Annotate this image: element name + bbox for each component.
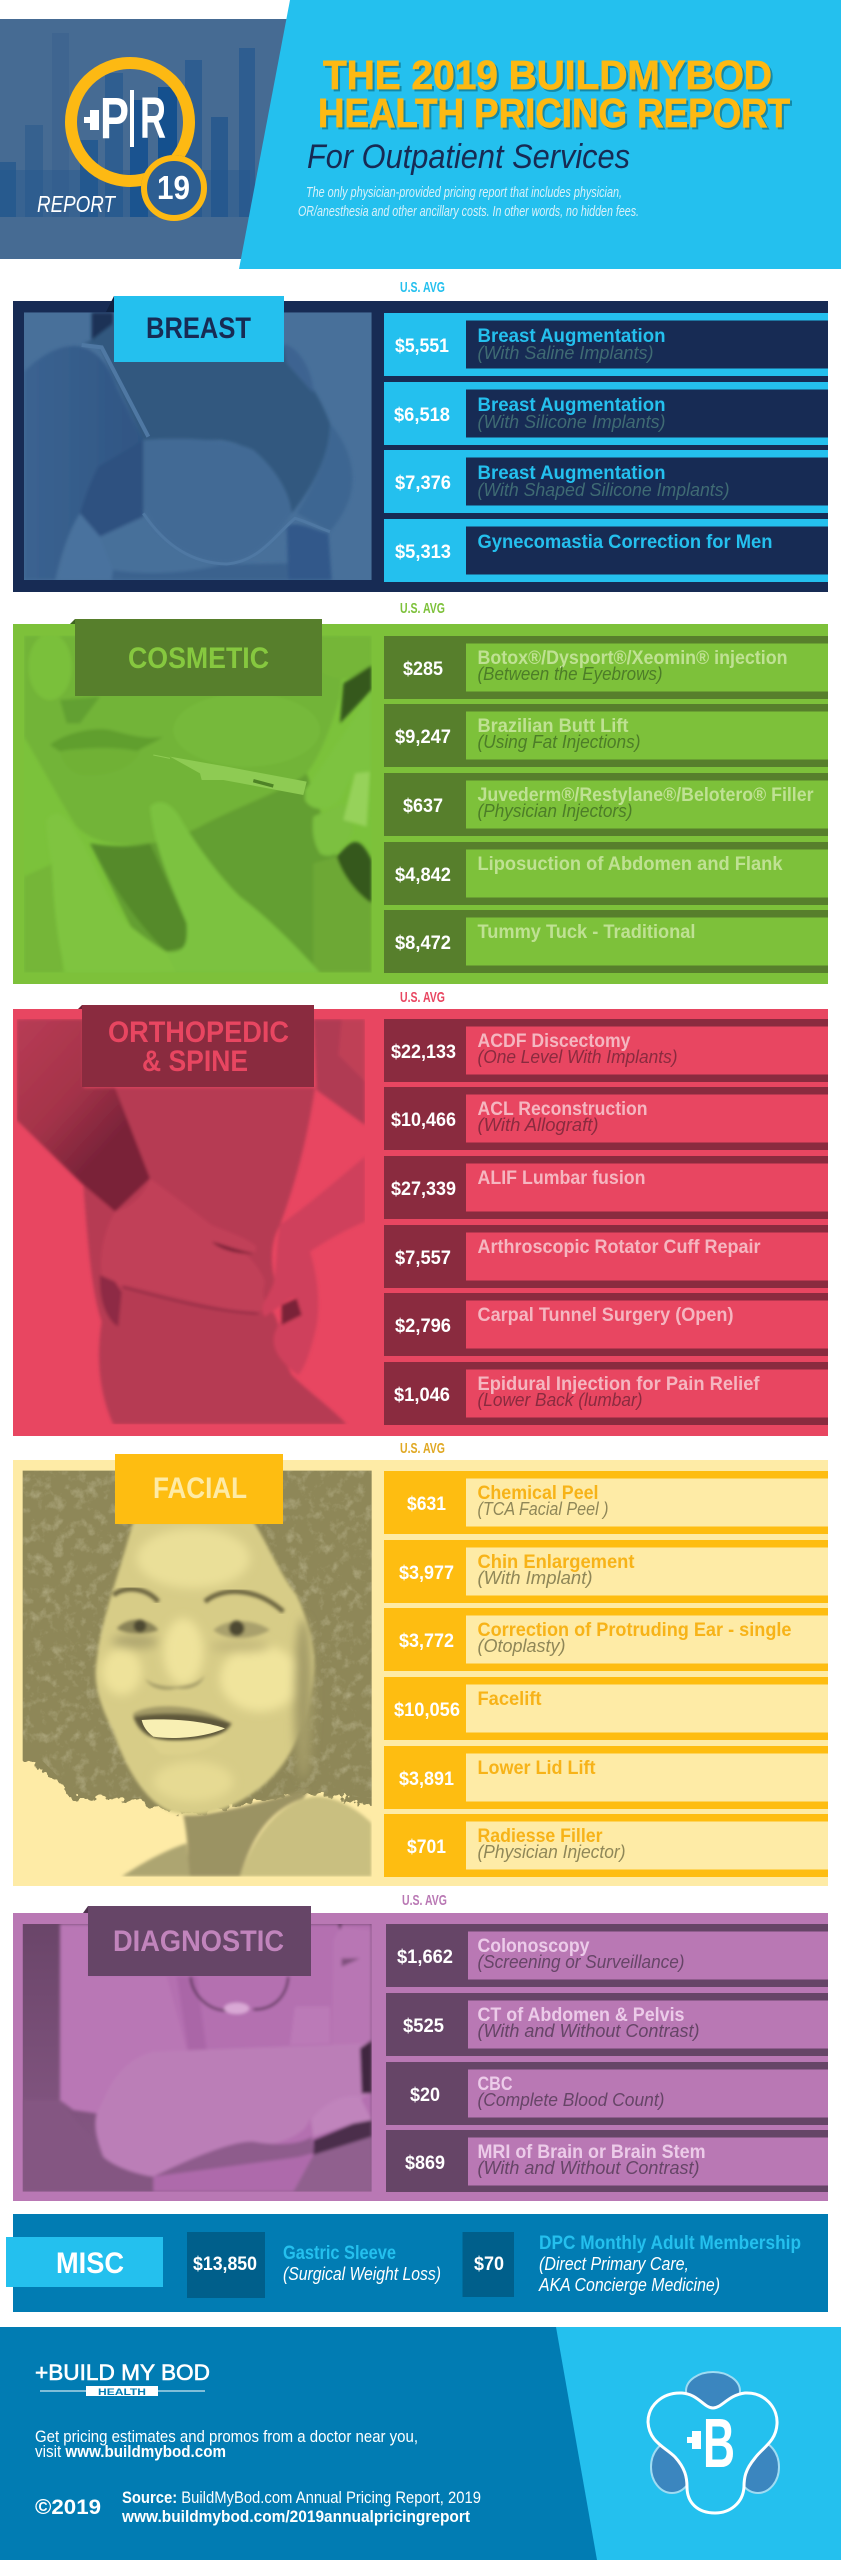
row: ACL: ACL Reconstruction bbox=[478, 1099, 648, 1120]
tab: diagnostic bbox=[83, 1906, 311, 1976]
row: Breast Augmentation shaped: Breast Augmentation bbox=[478, 463, 666, 484]
panel: orthopedic and spine bbox=[13, 1005, 828, 1436]
footer bbox=[0, 2327, 841, 2560]
row: Botox: (Between the Eyebrows) bbox=[478, 664, 662, 684]
row: CT: (With and Without Contrast) bbox=[478, 2021, 700, 2041]
row: Gynecomastia: $5,313 bbox=[395, 542, 451, 563]
row: Protruding Ear: $3,772 bbox=[399, 1631, 454, 1652]
text: call to action bbox=[35, 2427, 418, 2461]
icon: BuildMyBod clover: B bbox=[703, 2404, 735, 2482]
title: THE 2019 BUILDMYBOD bbox=[325, 54, 774, 100]
subtitle: For Outpatient Services bbox=[307, 138, 630, 176]
tab: breast bbox=[106, 296, 284, 362]
title bbox=[318, 52, 792, 138]
tab: orthopedic: ORTHOPEDIC bbox=[108, 1016, 289, 1049]
title: HEALTH PRICING REPORT bbox=[318, 90, 790, 136]
row: Juvederm: (Physician Injectors) bbox=[478, 801, 632, 821]
row: Chin Enlargement bbox=[384, 1540, 828, 1603]
row: Breast Augmentation saline: (With Saline Implants) bbox=[478, 343, 654, 363]
header: logo panel bbox=[0, 19, 300, 259]
row: Breast Augmentation saline: $5,551 bbox=[395, 336, 449, 357]
price: gastric sleeve bbox=[187, 2232, 265, 2298]
photo: breast bbox=[24, 312, 372, 580]
row: Facelift: $10,056 bbox=[394, 1700, 460, 1721]
photo: diagnostic bbox=[23, 1924, 372, 2192]
title: THE 2019 BUILDMYBOD bbox=[323, 52, 772, 98]
row: Juvederm: Juvederm®/Restylane®/Belotero® Filler bbox=[478, 785, 814, 806]
row: Brazilian Butt Lift: Brazilian Butt Lift bbox=[478, 716, 629, 737]
photo: cosmetic bbox=[24, 633, 372, 973]
row: Protruding Ear: Correction of Protruding Ear - single bbox=[478, 1620, 792, 1641]
row: MRI: $869 bbox=[405, 2153, 445, 2174]
description: The only physician-provided pricing report that includes physician, bbox=[306, 184, 622, 201]
column heading: U.S. AVG facial: U.S. AVG bbox=[400, 1440, 445, 1457]
panel: facial bbox=[10, 1454, 828, 1886]
row: Botox bbox=[384, 636, 828, 699]
row: Chemical Peel bbox=[384, 1471, 828, 1534]
decorative chart bars bbox=[0, 33, 255, 217]
logo: BuildMyBod Health bbox=[35, 2360, 210, 2397]
row: Chemical Peel: Chemical Peel bbox=[478, 1483, 598, 1504]
tab: cosmetic bbox=[70, 619, 322, 696]
row: ACL: $10,466 bbox=[391, 1110, 456, 1131]
description bbox=[298, 184, 639, 220]
row: Breast Augmentation saline bbox=[384, 313, 828, 376]
panel: breast bbox=[13, 296, 828, 592]
logo: PR report ring: P bbox=[100, 86, 129, 151]
tab: diagnostic: DIAGNOSTIC bbox=[113, 1925, 284, 1958]
text: copyright: ©2019 bbox=[35, 2496, 101, 2519]
row: Botox: Botox®/Dysport®/Xeomin® injection bbox=[478, 648, 788, 669]
row: Breast Augmentation shaped: (With Shaped Silicone Implants) bbox=[478, 480, 730, 500]
row: Epidural: $1,046 bbox=[394, 1385, 450, 1406]
row: CT: $525 bbox=[403, 2016, 444, 2037]
row: Juvederm bbox=[384, 773, 828, 836]
description: OR/anesthesia and other ancillary costs. In other words, no hidden fees. bbox=[298, 203, 639, 220]
row: ACDF: (One Level With Implants) bbox=[478, 1047, 678, 1067]
label: DPC membership bbox=[538, 2233, 801, 2295]
logo: PR report ring: 19 bbox=[157, 169, 190, 206]
text: call to action: Get pricing estimates and promos from a doctor near you, bbox=[35, 2427, 418, 2446]
row: CBC: (Complete Blood Count) bbox=[478, 2090, 664, 2110]
row: Epidural bbox=[384, 1362, 828, 1425]
row: Chemical Peel: (TCA Facial Peel ) bbox=[478, 1499, 608, 1519]
row: CT bbox=[386, 1993, 828, 2056]
tab: cosmetic: COSMETIC bbox=[128, 642, 269, 675]
row: CBC: $20 bbox=[410, 2085, 440, 2106]
row: Breast Augmentation silicone: Breast Augmentation bbox=[478, 395, 666, 416]
row: Rotator Cuff: $7,557 bbox=[395, 1248, 451, 1269]
label: DPC membership: DPC Monthly Adult Membership bbox=[539, 2233, 801, 2254]
row: Protruding Ear: (Otoplasty) bbox=[478, 1636, 566, 1656]
tab: facial: FACIAL bbox=[153, 1472, 247, 1505]
tab: misc bbox=[6, 2237, 163, 2287]
row: Colonoscopy bbox=[386, 1924, 828, 1987]
photo: orthopedic bbox=[17, 1019, 365, 1424]
text: call to action: visit www.buildmybod.com bbox=[35, 2442, 226, 2461]
logo: PR report ring: REPORT bbox=[37, 191, 117, 217]
label: gastric sleeve: Gastric Sleeve bbox=[283, 2243, 396, 2264]
row: Breast Augmentation silicone: $6,518 bbox=[394, 405, 450, 426]
row: Epidural: (Lower Back (lumbar) bbox=[478, 1390, 642, 1410]
label: gastric sleeve bbox=[283, 2243, 441, 2284]
row: Carpal Tunnel: Carpal Tunnel Surgery (Open) bbox=[478, 1305, 734, 1326]
row: CT: CT of Abdomen & Pelvis bbox=[478, 2005, 684, 2026]
panel: diagnostic bbox=[13, 1906, 828, 2201]
row: Lower Lid Lift: Lower Lid Lift bbox=[478, 1758, 596, 1779]
header: title panel bbox=[239, 0, 841, 269]
photo: facial bbox=[10, 1458, 387, 1877]
icon: BuildMyBod clover bbox=[648, 2372, 779, 2513]
row: Radiesse Filler: (Physician Injector) bbox=[478, 1842, 626, 1862]
row: Lower Lid Lift bbox=[384, 1746, 828, 1809]
price: DPC membership: $70 bbox=[474, 2254, 504, 2275]
row: Botox: $285 bbox=[403, 659, 443, 680]
row: Facelift bbox=[384, 1677, 828, 1740]
row: Carpal Tunnel: $2,796 bbox=[395, 1316, 451, 1337]
label: gastric sleeve: (Surgical Weight Loss) bbox=[283, 2264, 441, 2284]
text: source bbox=[121, 2488, 481, 2526]
row: ACDF bbox=[384, 1019, 828, 1082]
row: Radiesse Filler: Radiesse Filler bbox=[478, 1826, 603, 1847]
panel: misc bbox=[6, 2214, 828, 2312]
row: Liposuction: $4,842 bbox=[395, 865, 451, 886]
tab: orthopedic: & SPINE bbox=[142, 1045, 248, 1078]
row: ALIF: $27,339 bbox=[391, 1179, 456, 1200]
row: Breast Augmentation silicone: (With Silicone Implants) bbox=[478, 412, 666, 432]
label: DPC membership: AKA Concierge Medicine) bbox=[538, 2275, 720, 2295]
row: ACDF: $22,133 bbox=[391, 1042, 456, 1063]
row: Radiesse Filler bbox=[384, 1814, 828, 1877]
row: Facelift: Facelift bbox=[478, 1689, 542, 1710]
row: Lower Lid Lift: $3,891 bbox=[399, 1769, 454, 1790]
row: Gynecomastia bbox=[384, 519, 828, 582]
row: Liposuction bbox=[384, 842, 828, 905]
row: Colonoscopy: Colonoscopy bbox=[478, 1936, 590, 1957]
logo: BuildMyBod Health: HEALTH bbox=[98, 2387, 146, 2397]
row: Rotator Cuff bbox=[384, 1225, 828, 1288]
text: source: Source: BuildMyBod.com Annual Pricing Report, 2019 bbox=[122, 2488, 481, 2507]
row: ACL: (With Allograft) bbox=[478, 1115, 598, 1135]
row: Epidural: Epidural Injection for Pain Relief bbox=[478, 1374, 760, 1395]
tab: misc: MISC bbox=[56, 2247, 124, 2280]
label: DPC membership: (Direct Primary Care, bbox=[539, 2254, 689, 2274]
column heading: U.S. AVG cosmetic: U.S. AVG bbox=[400, 600, 445, 617]
row: Liposuction: Liposuction of Abdomen and Flank bbox=[478, 854, 783, 875]
row: Breast Augmentation shaped bbox=[384, 450, 828, 513]
price: DPC membership bbox=[462, 2232, 514, 2297]
row: Gynecomastia: Gynecomastia Correction for Men bbox=[478, 532, 772, 553]
column heading: U.S. AVG breast: U.S. AVG bbox=[400, 279, 445, 296]
row: Rotator Cuff: Arthroscopic Rotator Cuff Repair bbox=[478, 1237, 761, 1258]
row: Brazilian Butt Lift bbox=[384, 704, 828, 767]
panel: cosmetic bbox=[13, 619, 828, 984]
row: Tummy Tuck bbox=[384, 910, 828, 973]
row: Breast Augmentation shaped: $7,376 bbox=[395, 473, 451, 494]
row: MRI: MRI of Brain or Brain Stem bbox=[478, 2142, 706, 2163]
column heading: U.S. AVG diagnostic: U.S. AVG bbox=[402, 1892, 447, 1909]
row: Tummy Tuck: Tummy Tuck - Traditional bbox=[478, 922, 696, 943]
tab: facial bbox=[115, 1454, 283, 1524]
row: Chin Enlargement: Chin Enlargement bbox=[478, 1552, 635, 1573]
tab: orthopedic bbox=[78, 1005, 314, 1087]
row: ACL bbox=[384, 1087, 828, 1150]
row: Chemical Peel: $631 bbox=[407, 1494, 446, 1515]
row: Brazilian Butt Lift: (Using Fat Injections) bbox=[478, 732, 640, 752]
logo: BuildMyBod Health: +BUILD MY BOD bbox=[35, 2360, 210, 2385]
logo: PR report ring: R bbox=[140, 86, 166, 151]
logo: PR report ring bbox=[37, 63, 207, 221]
tab: breast: BREAST bbox=[146, 312, 251, 345]
text: source: www.buildmybod.com/2019annualpricingreport bbox=[121, 2507, 470, 2526]
row: Colonoscopy: $1,662 bbox=[397, 1947, 453, 1968]
title: HEALTH PRICING REPORT bbox=[320, 92, 792, 138]
row: Colonoscopy: (Screening or Surveillance) bbox=[478, 1952, 684, 1972]
row: ACDF: ACDF Discectomy bbox=[478, 1031, 631, 1052]
price: gastric sleeve: $13,850 bbox=[193, 2254, 257, 2275]
row: Breast Augmentation saline: Breast Augmentation bbox=[478, 326, 666, 347]
row: MRI bbox=[386, 2130, 828, 2192]
row: ALIF: ALIF Lumbar fusion bbox=[478, 1168, 646, 1189]
row: CBC: CBC bbox=[478, 2074, 513, 2095]
row: ALIF bbox=[384, 1156, 828, 1219]
row: Chin Enlargement: $3,977 bbox=[399, 1563, 454, 1584]
row: Tummy Tuck: $8,472 bbox=[395, 933, 451, 954]
row: Carpal Tunnel bbox=[384, 1293, 828, 1356]
row: CBC bbox=[386, 2062, 828, 2125]
row: Juvederm: $637 bbox=[403, 796, 443, 817]
column heading: U.S. AVG orthopedic: U.S. AVG bbox=[400, 989, 445, 1006]
row: MRI: (With and Without Contrast) bbox=[478, 2158, 700, 2178]
row: Protruding Ear bbox=[384, 1608, 828, 1671]
row: Brazilian Butt Lift: $9,247 bbox=[395, 727, 451, 748]
row: Breast Augmentation silicone bbox=[384, 382, 828, 445]
row: Chin Enlargement: (With Implant) bbox=[478, 1568, 592, 1588]
row: Radiesse Filler: $701 bbox=[407, 1837, 446, 1858]
